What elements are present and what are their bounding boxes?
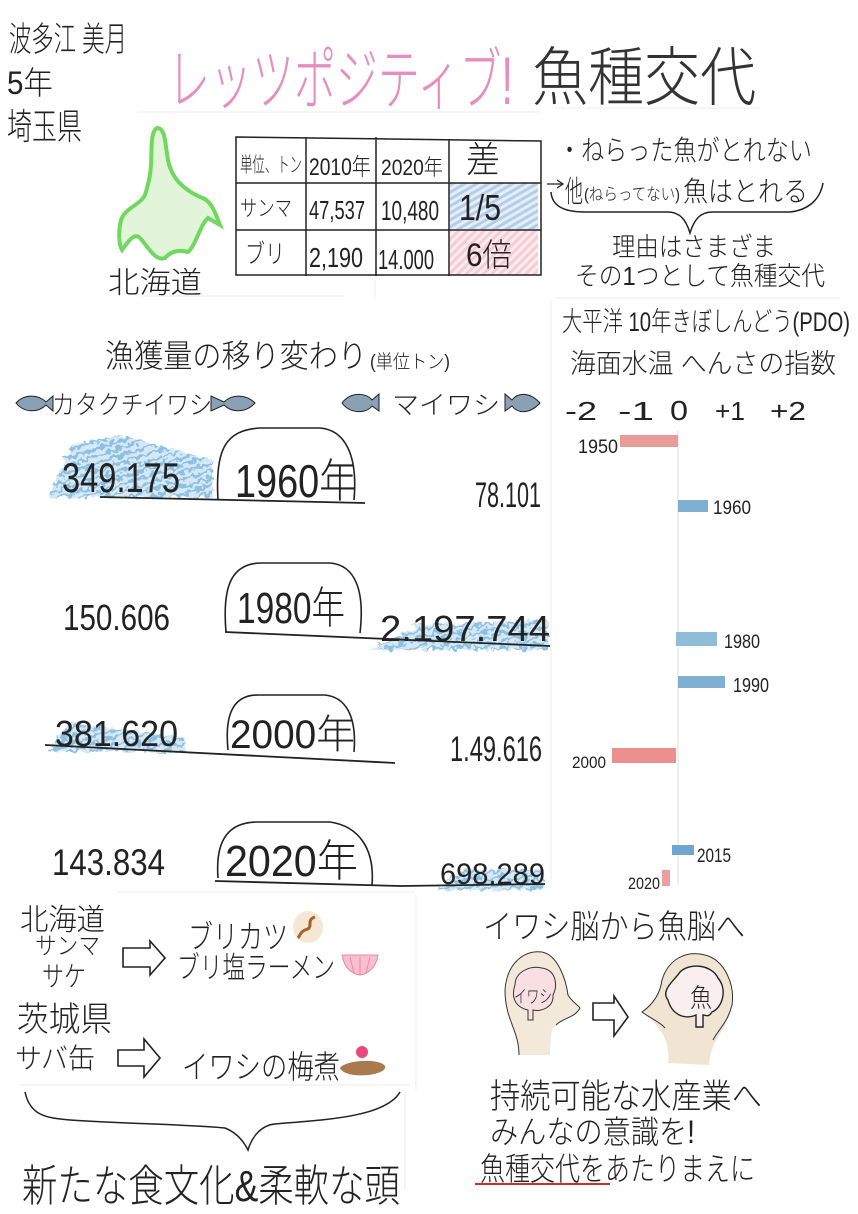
panel: new food culture: 茨城県 <box>17 1001 112 1039</box>
row: 1980 catch: 1980年 <box>237 584 345 633</box>
author name and prefecture: 埼玉県 <box>7 106 82 147</box>
author name and prefecture: 5年 <box>7 65 53 101</box>
table: catch 2010 vs 2020: サンマ <box>240 196 292 221</box>
text block: why the catch changes: その1つとして魚種交代 <box>575 261 825 291</box>
panel: from sardine brain to fish brain: 魚 <box>690 983 712 1013</box>
panel: from sardine brain to fish brain: 魚種交代をあたりまえに <box>480 1151 755 1187</box>
heading: catch changes: (単位トン) <box>370 351 450 373</box>
species labels with fish icons <box>16 390 540 420</box>
row: 1960 catch: 349.175 <box>62 454 180 501</box>
text block: why the catch changes: 魚はとれる <box>683 176 808 207</box>
table: catch 2010 vs 2020: 2,190 <box>309 242 363 273</box>
table: catch 2010 vs 2020: 10,480 <box>381 195 439 226</box>
table: catch 2010 vs 2020: 47,537 <box>309 195 365 225</box>
bar chart: PDO by year: -1 <box>618 396 654 426</box>
panel: new food culture: 北海道 <box>20 904 105 937</box>
bar chart: PDO by year: +1 <box>715 396 745 426</box>
species labels with fish icons: カタクチイワシ <box>52 390 212 420</box>
row: 1980 catch: 2.197.744 <box>380 608 550 649</box>
map: Hokkaido <box>119 128 220 259</box>
bar chart: PDO by year <box>565 395 806 893</box>
heading: PDO chart: 海面水温 へんさの指数 <box>570 349 836 379</box>
table: catch 2010 vs 2020 <box>236 137 541 276</box>
row: 1960 catch: 78.101 <box>475 476 541 515</box>
panel: new food culture <box>15 904 400 1211</box>
panel: new food culture: ブリ塩ラーメン <box>177 952 335 985</box>
title: 魚種交代 <box>532 42 756 114</box>
bar chart: PDO by year: 2015 <box>697 846 731 867</box>
text block: why the catch changes: 他 <box>565 176 583 209</box>
table: catch 2010 vs 2020: 6倍 <box>466 237 512 273</box>
panel: new food culture: 新たな食文化&柔軟な頭 <box>22 1162 400 1211</box>
title: レッツポジティブ! <box>168 43 513 119</box>
author name and prefecture <box>7 21 127 147</box>
bar chart: PDO by year: 2020 <box>628 874 660 893</box>
panel: from sardine brain to fish brain <box>475 908 762 1187</box>
row: 1960 catch: 1960年 <box>235 455 357 507</box>
table: catch 2010 vs 2020: 単位、トン <box>240 154 302 177</box>
row: 2000 catch: 1.49.616 <box>450 730 542 769</box>
panel: new food culture: イワシの梅煮 <box>182 1049 340 1085</box>
text block: why the catch changes <box>547 135 825 291</box>
row: 2000 catch: 2000年 <box>230 713 355 757</box>
table: catch 2010 vs 2020: 2020年 <box>381 155 443 180</box>
table: catch 2010 vs 2020: 14.000 <box>378 244 434 275</box>
panel: from sardine brain to fish brain: イワシ <box>514 987 552 1007</box>
row: 2020 catch: 698.289 <box>440 858 545 891</box>
row: 2020 catch: 2020年 <box>225 837 358 886</box>
panel: new food culture: サバ缶 <box>15 1043 95 1074</box>
bar chart: PDO by year: +2 <box>770 396 806 426</box>
panel: new food culture: サケ <box>42 961 86 992</box>
bar chart: PDO by year: 1980 <box>724 632 760 653</box>
row: 1980 catch: 150.606 <box>63 597 170 638</box>
row: 2020 catch: 143.834 <box>52 842 165 883</box>
row: 1980 catch <box>63 563 550 650</box>
row: 2020 catch <box>52 822 545 891</box>
panel: from sardine brain to fish brain: みんなの意識を! <box>490 1114 695 1150</box>
row: 2000 catch: 381.620 <box>55 713 178 754</box>
text block: why the catch changes: (ねらってない) <box>584 185 680 204</box>
bar chart: PDO by year: 1990 <box>733 675 769 697</box>
table: catch 2010 vs 2020: 1/5 <box>459 187 501 228</box>
bar chart: PDO by year: 1950 <box>578 437 618 458</box>
panel: from sardine brain to fish brain: イワシ脳から魚脳へ <box>483 908 745 945</box>
row: 2000 catch <box>45 695 542 769</box>
bar chart: PDO by year: 1960 <box>713 498 751 519</box>
text block: why the catch changes: ・ねらった魚がとれない <box>558 135 812 166</box>
table: catch 2010 vs 2020: ブリ <box>245 239 285 269</box>
row: 1960 catch <box>48 428 541 515</box>
heading: catch changes: 漁獲量の移り変わり <box>105 338 367 374</box>
author name and prefecture: 波多江 美月 <box>9 21 127 59</box>
bar chart: PDO by year: 2000 <box>572 753 606 772</box>
table: catch 2010 vs 2020: 2010年 <box>309 154 371 181</box>
text block: why the catch changes: 理由はさまざま <box>612 232 776 262</box>
species labels with fish icons: マイワシ <box>392 390 500 420</box>
table: catch 2010 vs 2020: 差 <box>466 139 500 180</box>
panel: new food culture: サンマ <box>35 933 100 960</box>
label: Hokkaido: 北海道 <box>108 267 202 300</box>
panel: from sardine brain to fish brain: 持続可能な水産業へ <box>490 1078 762 1116</box>
panel: new food culture: ブリカツ <box>188 919 288 955</box>
bar chart: PDO by year: -2 <box>565 396 597 426</box>
bar chart: PDO by year: 0 <box>670 395 688 426</box>
heading: PDO chart <box>562 307 850 379</box>
